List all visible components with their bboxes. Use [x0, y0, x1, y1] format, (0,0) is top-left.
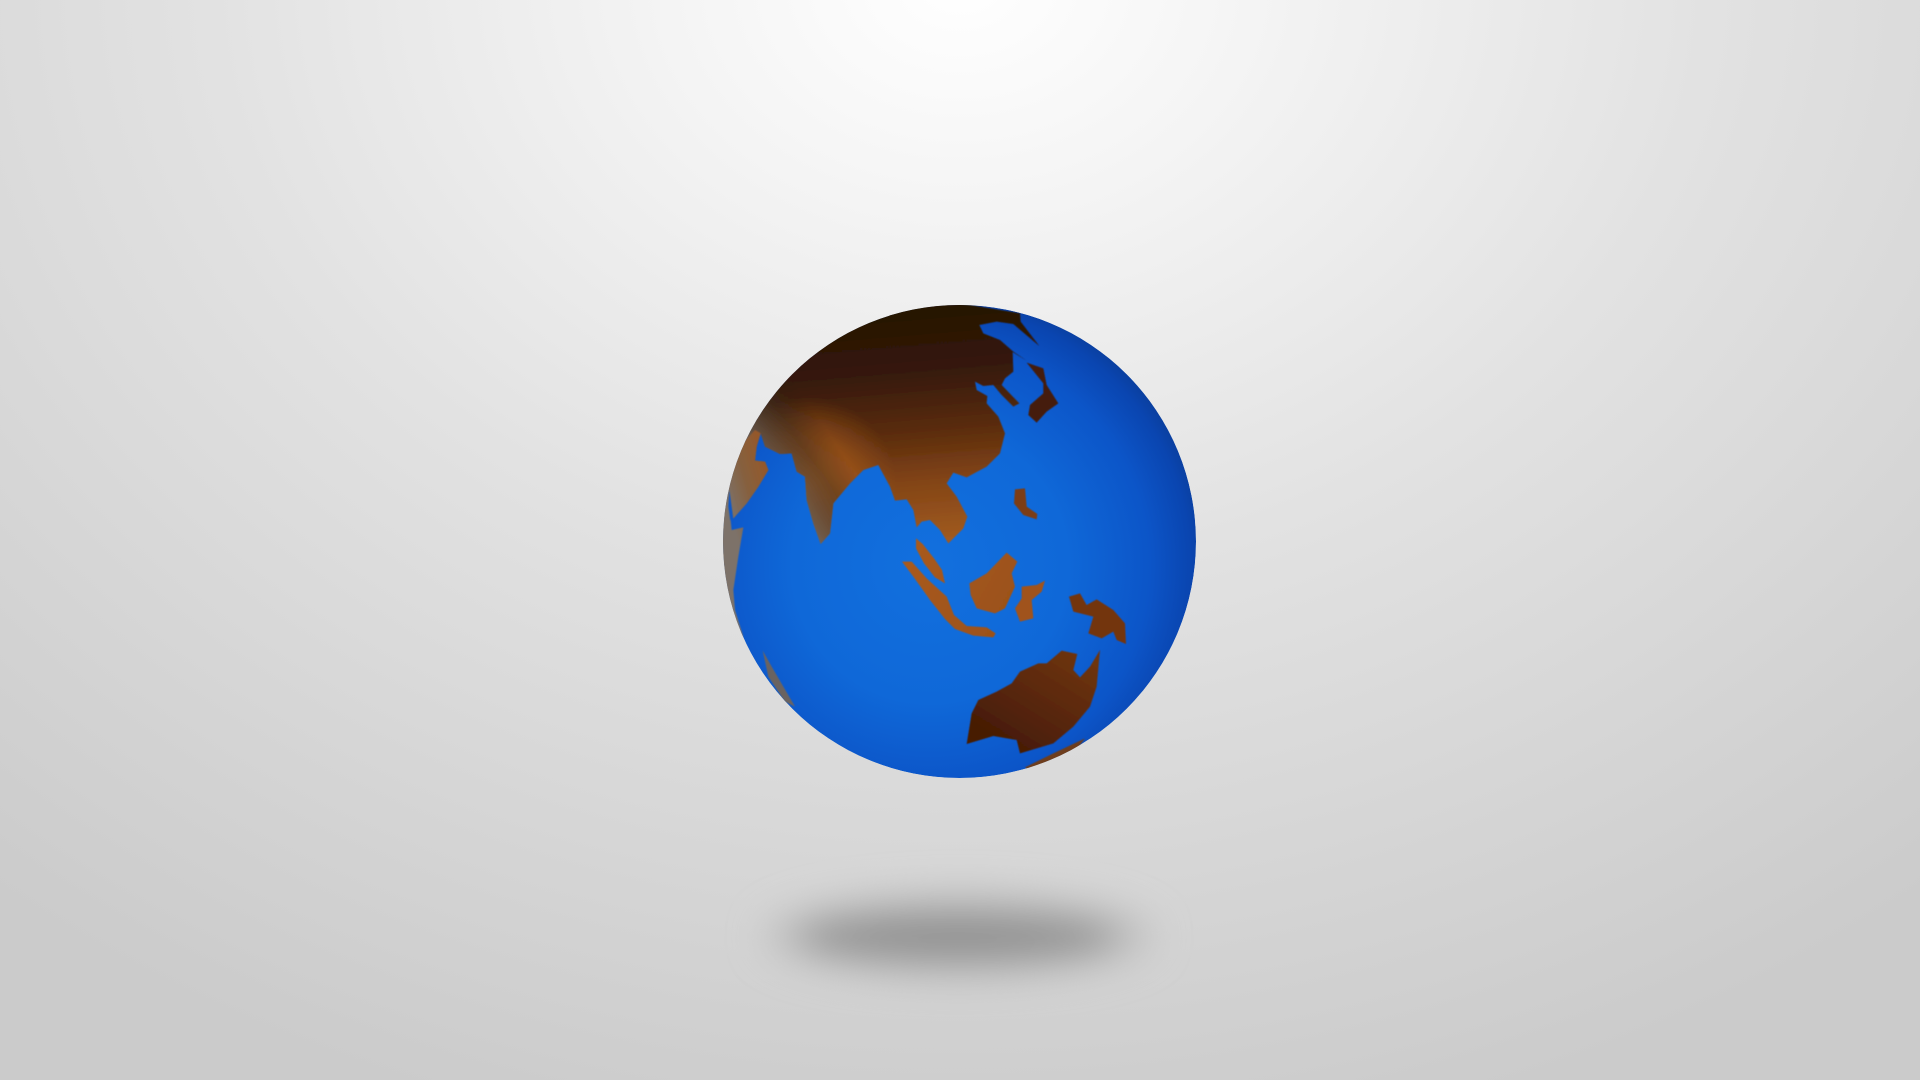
island: Borneo	[969, 553, 1017, 613]
northern landmasses	[717, 297, 1058, 637]
landmass: Asia	[720, 297, 1039, 544]
islands and Australia	[763, 538, 1126, 773]
island: New Guinea	[1069, 593, 1126, 644]
island: Sulawesi	[1015, 581, 1045, 622]
ground shadow	[764, 892, 1154, 980]
island: New Zealand sliver	[1025, 738, 1085, 773]
island: South America sliver	[763, 651, 795, 707]
ocean sphere	[723, 305, 1196, 778]
island: Taiwan and Philippines	[1014, 488, 1037, 519]
island: Sumatra and Java	[902, 562, 996, 637]
globe	[717, 297, 1196, 778]
island: Sakhalin and Japan	[1027, 363, 1058, 423]
landmass: Arabia edge	[720, 430, 768, 523]
landmass: Africa edge	[717, 520, 743, 637]
island: Australia	[967, 650, 1100, 753]
island: Malay peninsula	[916, 538, 945, 583]
